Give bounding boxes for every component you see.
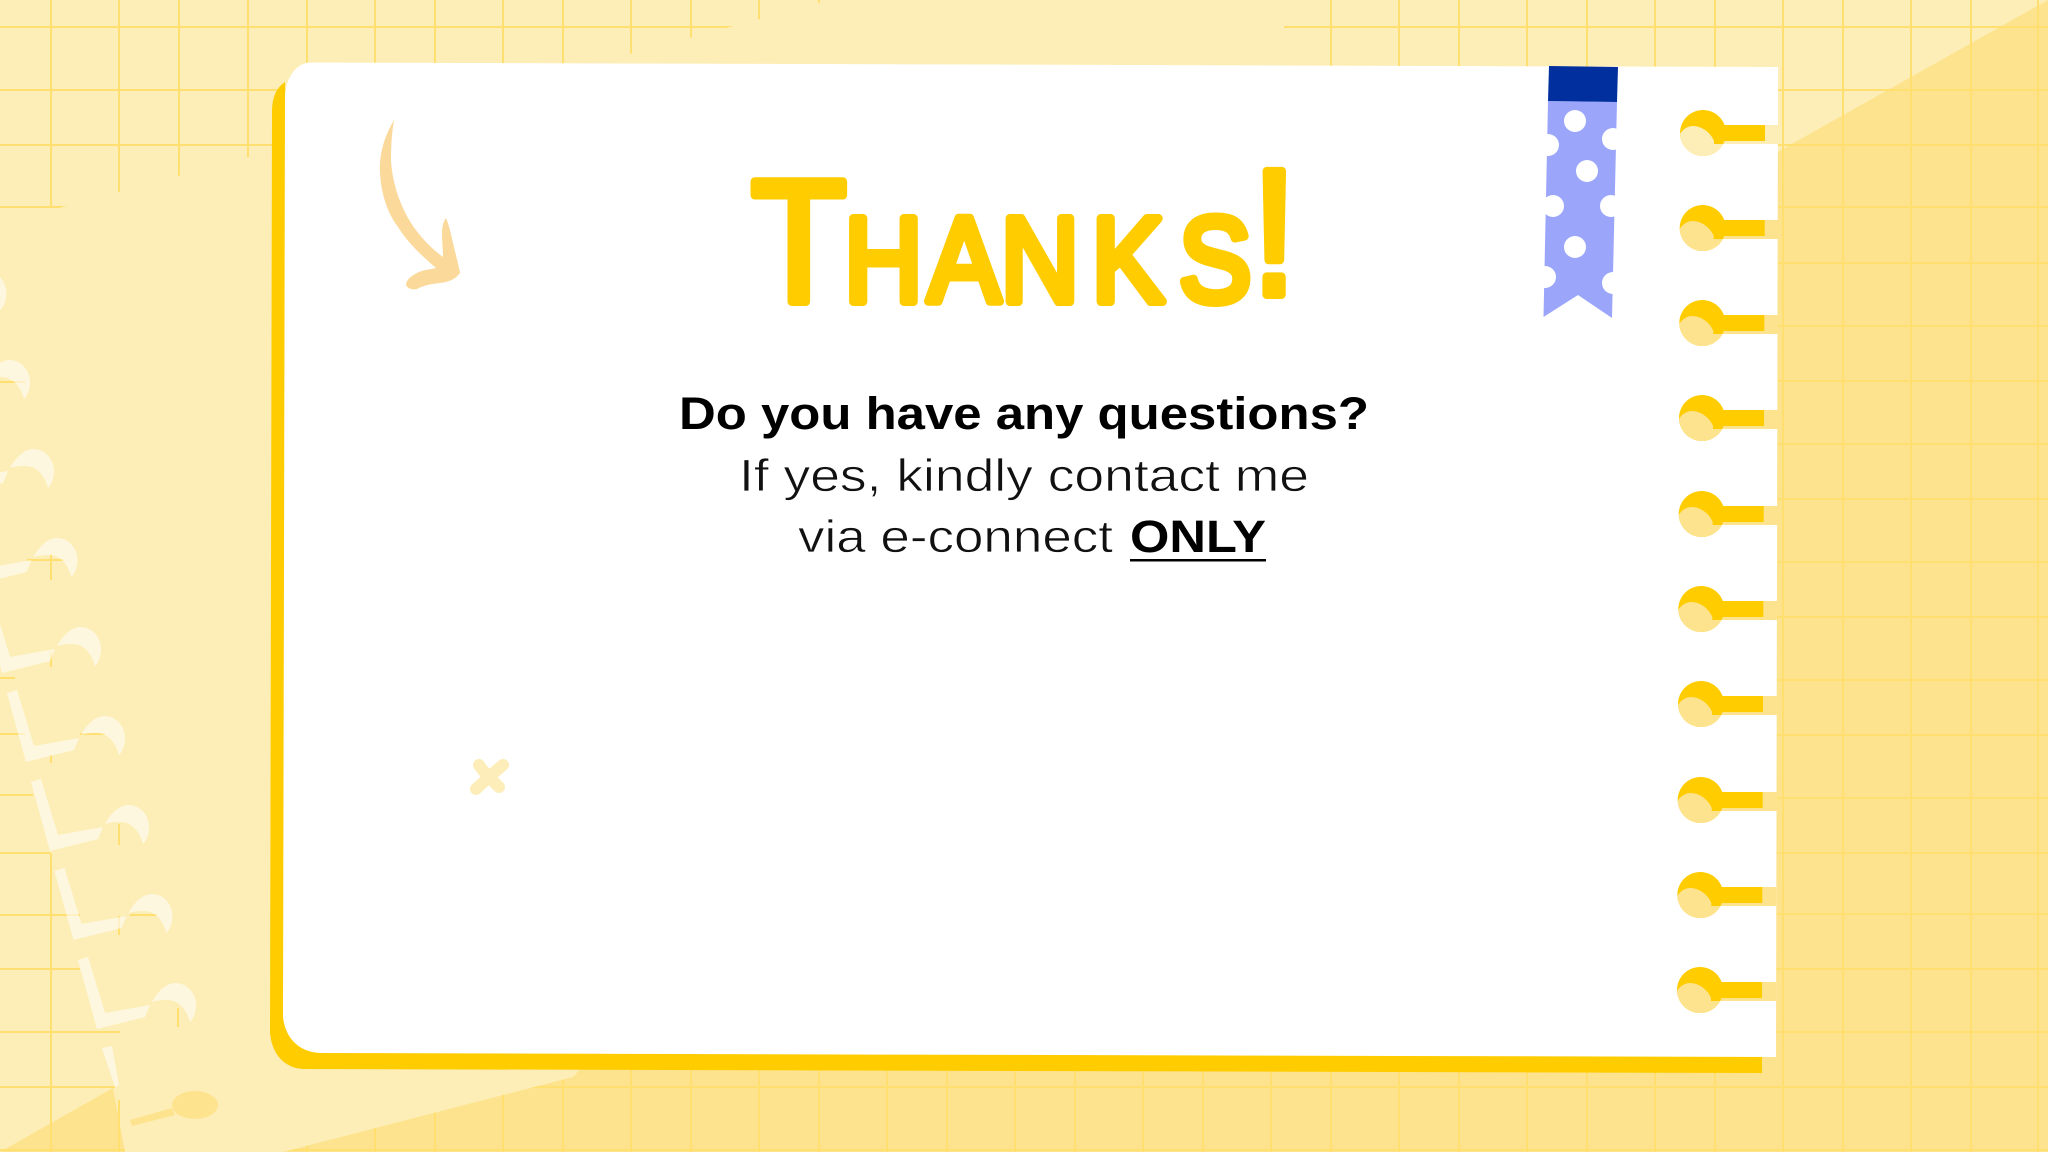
- contact line: If yes, kindly contact me: [739, 450, 1309, 501]
- grid fragments at lower left: [0, 382, 178, 1152]
- ring 4: [1679, 395, 1778, 441]
- title: H: [844, 193, 923, 328]
- ring 7: [1678, 681, 1777, 727]
- title: N: [1001, 193, 1079, 328]
- faded spiral rings at left: [0, 245, 196, 1087]
- title: T: [751, 145, 847, 339]
- title: A: [928, 193, 1001, 328]
- ribbon top band: [1548, 66, 1618, 102]
- spiral binding holes: [1677, 110, 1779, 1013]
- ring 6: [1678, 586, 1777, 632]
- ring 9: [1677, 872, 1776, 918]
- text block: contact message: [679, 388, 1369, 562]
- title: K: [1092, 193, 1164, 328]
- icon: hand-drawn arrow: [380, 120, 460, 289]
- ribbon body: [1544, 101, 1617, 318]
- e-connect line: via e-connect: [798, 511, 1114, 562]
- bookmark ribbon: [1534, 66, 1624, 318]
- emphasised word ONLY: ONLY: [1130, 511, 1266, 562]
- title: S: [1179, 193, 1251, 328]
- question heading: Do you have any questions?: [679, 388, 1369, 439]
- ribbon polka dots: [1534, 110, 1624, 294]
- notebook page shadow edge: [270, 82, 1762, 1073]
- ring 8: [1678, 777, 1777, 823]
- notebook page: [283, 62, 1778, 1057]
- ring 1: [1680, 110, 1779, 156]
- ring 10: [1677, 967, 1776, 1013]
- faded last ring at bottom left: [130, 1091, 218, 1126]
- ring 3: [1679, 300, 1778, 346]
- ring 5: [1679, 491, 1778, 537]
- icon: small cross doodle: [476, 765, 503, 789]
- title: !: [1252, 134, 1297, 333]
- ring 2: [1680, 205, 1779, 251]
